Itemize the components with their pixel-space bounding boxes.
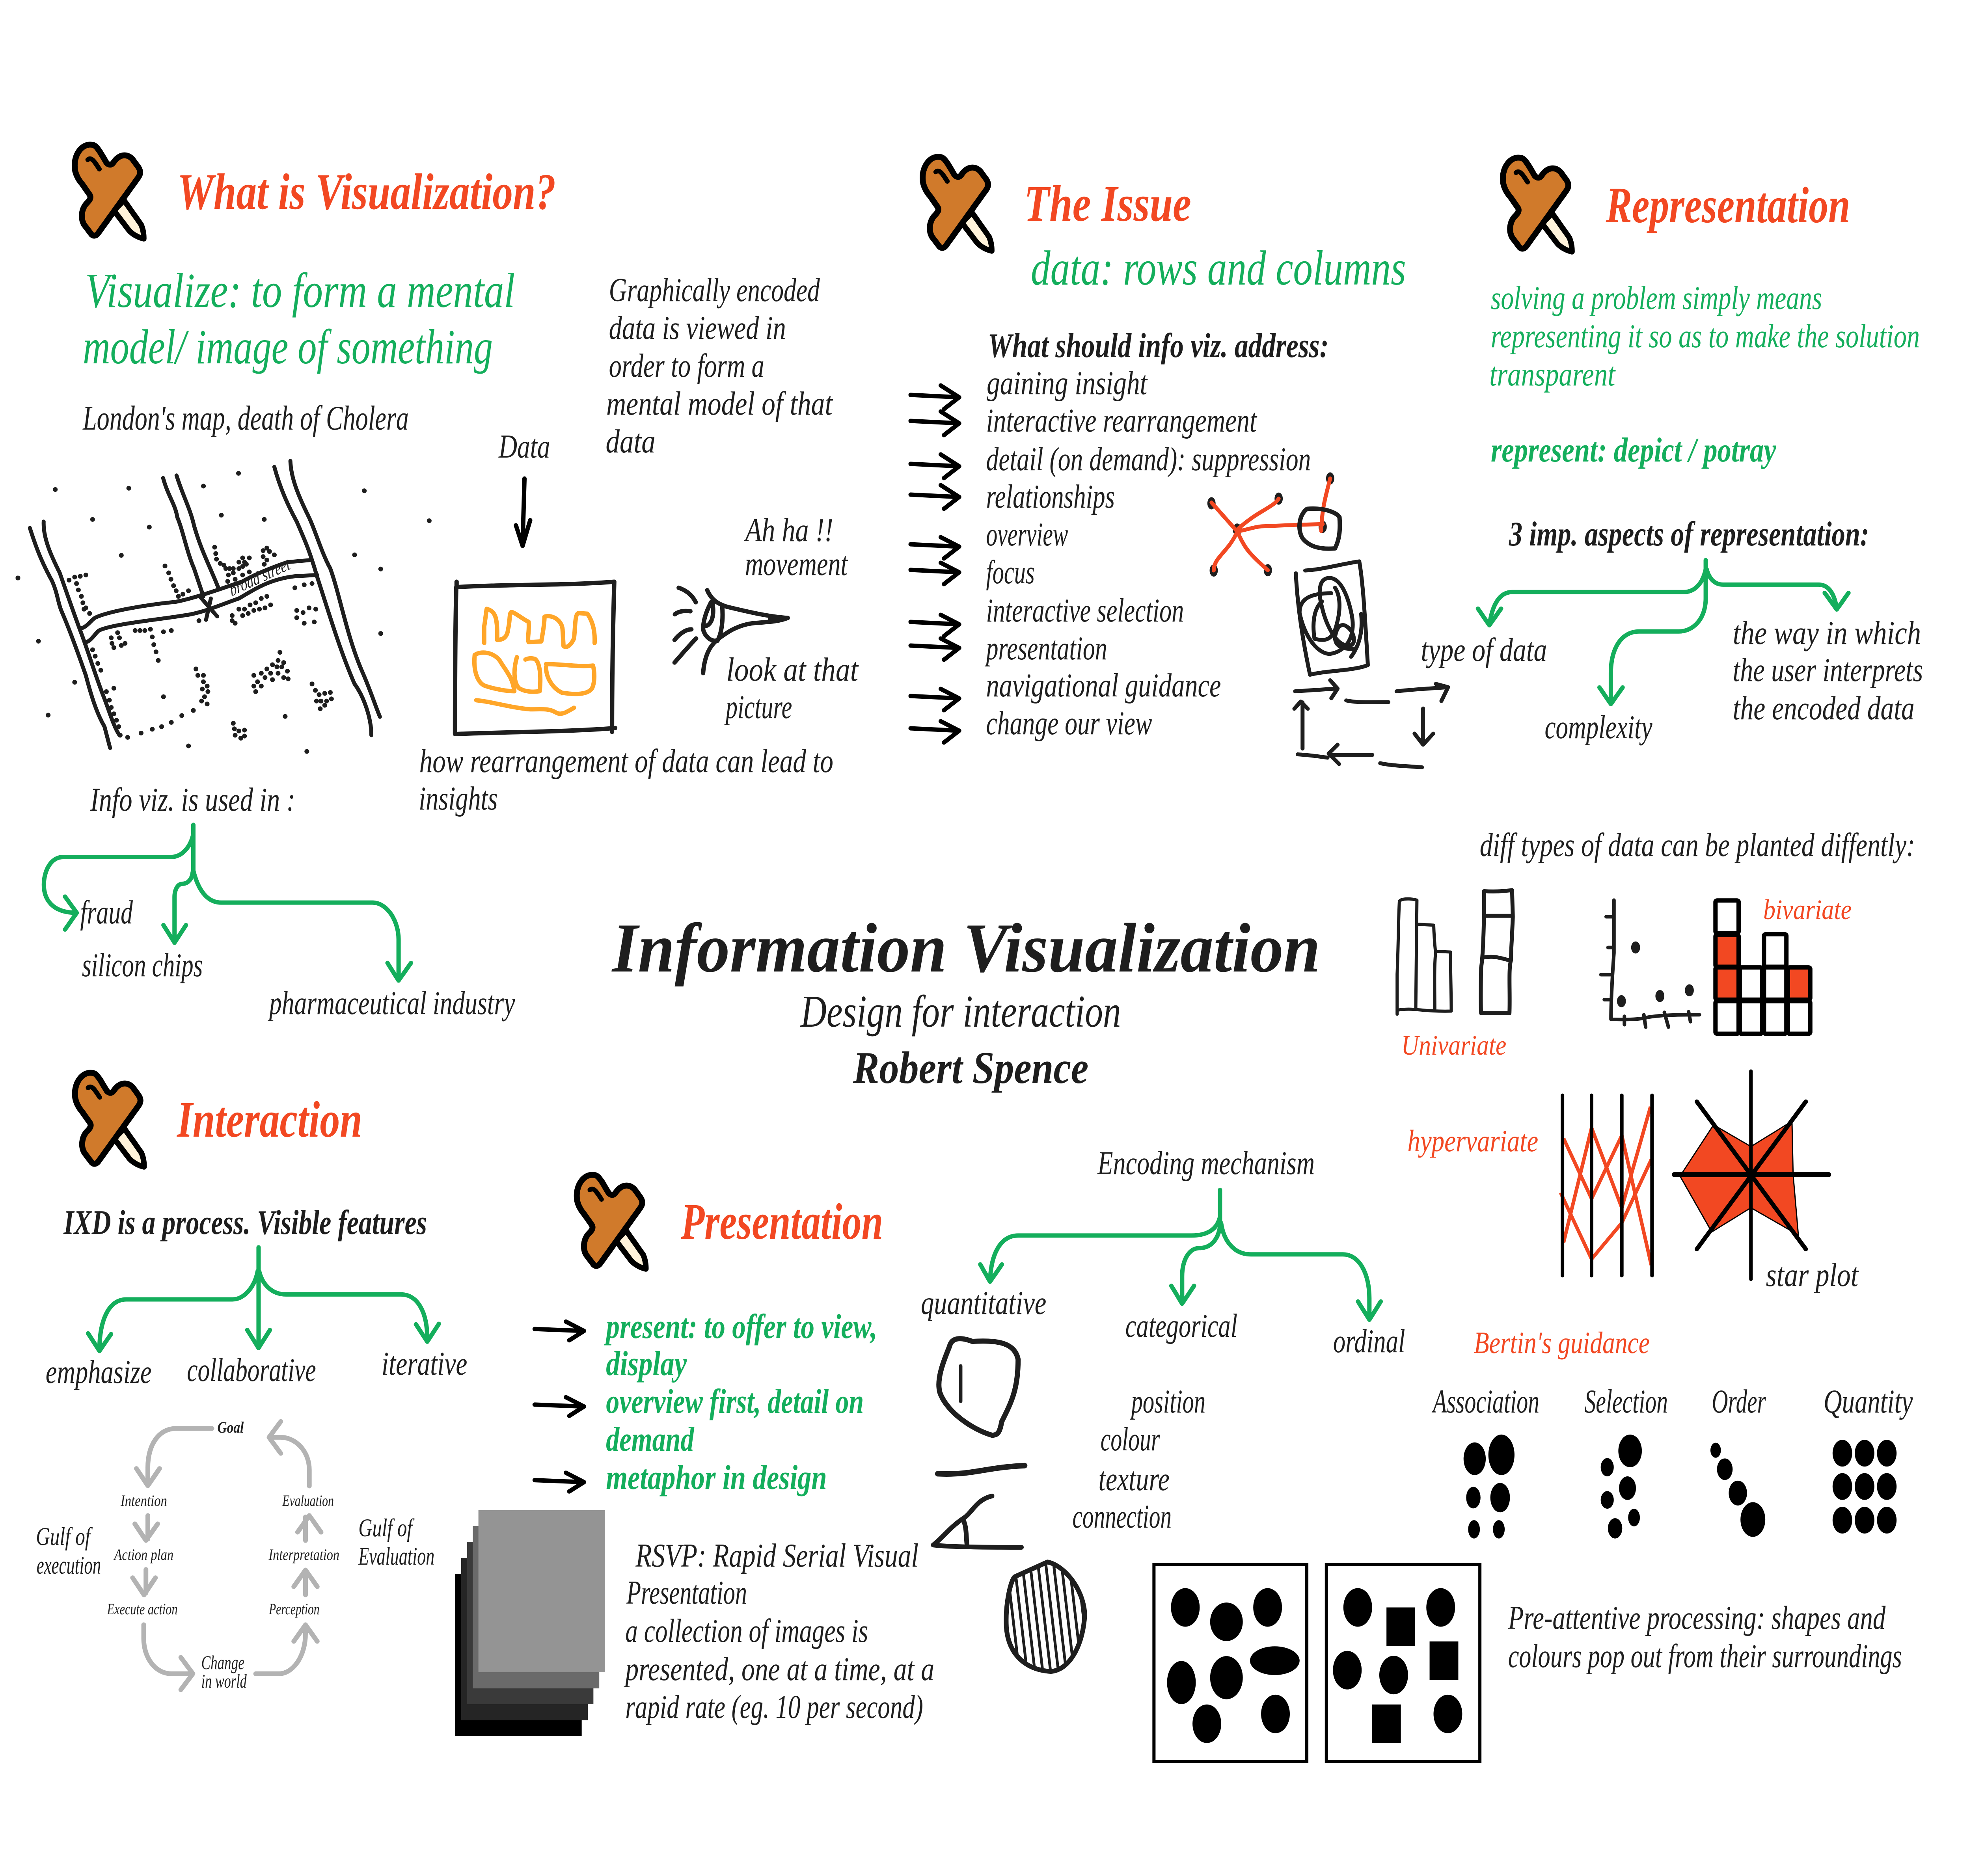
diagram: norman action cycle: Intention [120,1492,167,1509]
labels: aspects: complexity [1544,709,1652,746]
icon: eye [674,588,789,673]
text: issue list: interactive selection [986,592,1184,629]
diagram: norman action cycle: Goal [218,1419,244,1436]
chart: order dots [1710,1443,1765,1537]
text: london map caption: London's map, death of Cholera [82,399,409,437]
labels: aspects: the user interprets [1733,651,1923,689]
labels: bertin columns: Selection [1584,1383,1668,1420]
text: graphically encoded: data is viewed in [609,309,786,346]
text: rsvp: a collection of images is [625,1612,868,1649]
labels: info viz uses: fraud [80,894,133,931]
labels: ixd features: emphasize [46,1353,152,1390]
text: represent depict: represent: depict / potray [1491,431,1776,469]
labels: encoding types: ordinal [1333,1323,1405,1360]
text: visualize definition: model/ image of something [83,320,493,374]
text: gulf of execution [36,1522,101,1580]
diagram: rearranged data box [455,582,615,734]
icon: blob [939,1339,1018,1435]
text: rsvp: rapid rate (eg. 10 per second) [625,1688,923,1725]
text: look at that picture: picture [724,689,792,726]
text: issue list: focus [986,554,1035,591]
text: gulf of evaluation: Evaluation [358,1542,434,1571]
labels: info viz uses: silicon chips [82,947,203,984]
map: broad street cholera map [18,461,429,752]
labels: aspects: type of data [1421,631,1547,668]
text: presentation points: overview first, detail on [606,1382,864,1420]
panel: data types [1397,826,1915,1293]
diagram: scribble frame [1296,561,1368,675]
chart: quantity dots [1833,1440,1896,1534]
title: Information Visualization [611,909,1320,987]
text: issue list: overview [986,516,1068,553]
text: issue list: presentation [984,630,1107,667]
text: three aspects: 3 imp. aspects of representation: [1509,515,1869,553]
text: solving a problem [1489,279,1920,393]
heading: the issue: The Issue [1024,175,1191,232]
panel: what is visualization [18,145,859,1022]
text: visualize definition [83,263,515,374]
map: broad street cholera map: broad street [228,554,292,600]
text: pre-attentive: Pre-attentive processing: shapes and [1508,1599,1886,1636]
arrows: encoding branches [980,1190,1381,1320]
text: ah ha movement: Ah ha !! [743,512,833,549]
heading: bertin's guidance: Bertin's guidance [1474,1326,1650,1360]
labels: bertin columns: Association [1431,1383,1539,1420]
text: graphically encoded: mental model of that [606,385,833,422]
text: solving a problem: representing it so as to make the solution [1491,318,1920,355]
text: graphically encoded: order to form a [609,347,764,384]
labels: aspects: the way in which [1733,614,1921,651]
labels: aspects [1421,614,1923,746]
graphic: stack of images [455,1510,605,1736]
labels: aspects: the encoded data [1733,690,1915,727]
text: visualize definition: Visualize: to form a mental [85,263,515,318]
title block [611,909,1320,1093]
text: info viz used in: Info viz. is used in : [90,781,295,818]
heading: interaction: Interaction [176,1091,362,1148]
labels: encoding types: categorical [1125,1307,1237,1344]
diagram: arrow cycle [1294,680,1448,767]
text: issue list: change our view [986,705,1152,742]
labels: info viz uses [80,894,515,1022]
heading: what is visualization: What is Visualization? [177,163,556,220]
figure: mixed shapes box [1326,1565,1480,1761]
text: what should info viz address: What should info viz. address: [988,326,1329,365]
labels: ixd features: iterative [382,1345,467,1382]
panel: bertin's guidance [1431,1326,1913,1539]
text: encoding channels: colour [1101,1421,1160,1458]
text: look at that picture [724,651,859,726]
icon: pin representation [1503,158,1572,252]
icon: pin the issue [923,157,992,251]
text: diff types of data: diff types of data can be planted diffently: [1480,826,1915,864]
labels: bertin columns [1431,1383,1913,1420]
text: encoding channels [1072,1383,1205,1535]
text: presentation points: display [606,1344,687,1383]
text: presentation points: demand [606,1420,695,1458]
diagram: norman action cycle: in world [201,1670,247,1692]
arrow: data down [516,478,530,546]
icon: pin presentation [577,1175,646,1269]
text: solving a problem: transparent [1489,356,1616,393]
text: issue list: navigational guidance [986,667,1221,704]
text: encoding channels: position [1130,1383,1205,1420]
label: hypervariate: hypervariate [1407,1124,1538,1158]
text: look at that picture: look at that [726,651,859,688]
diagram: norman action cycle [107,1419,339,1692]
diagram: norman action cycle: Perception [268,1601,320,1618]
text: encoding channels: connection [1072,1498,1172,1535]
text: graphically encoded: Graphically encoded [609,272,820,309]
text: graphically encoded: data [606,423,656,460]
chart: parallel coordinates [1561,1095,1652,1276]
panel: representation [1421,158,1923,746]
icon: hatched blob [999,1562,1090,1673]
text: gulf of execution: Gulf of [36,1522,93,1551]
text: rsvp: RSVP: Rapid Serial Visual [635,1537,918,1574]
text: how rearrangement: how rearrangement of data can lead to [419,743,833,780]
chart: bivariate grid [1716,901,1810,1034]
text: ah ha movement [743,512,848,583]
text: presentation points [604,1307,877,1496]
chart: star plot [1675,1071,1829,1279]
text: rsvp: presented, one at a time, at a [624,1651,934,1688]
heading: presentation: Presentation [680,1193,883,1250]
figure: ovals box [1154,1565,1307,1761]
chart: selection dots [1601,1435,1642,1539]
chart: univariate bars [1397,890,1513,1014]
labels: ixd features [46,1345,467,1390]
arrows: presentation bullets [535,1321,584,1491]
diagram: norman action cycle: Action plan [114,1546,173,1563]
label: univariate: Univariate [1401,1029,1506,1061]
text: how rearrangement: insights [419,780,498,817]
labels: ixd features: collaborative [187,1351,316,1388]
heading: representation: Representation [1606,177,1850,233]
labels: bertin columns: Quantity [1824,1383,1913,1420]
text: encoding mechanism: Encoding mechanism [1097,1145,1315,1182]
arrows: aspects branches [1478,560,1848,704]
text: presentation points: metaphor in design [606,1458,827,1496]
text: gulf of evaluation: Gulf of [358,1514,415,1542]
author: Robert Spence [853,1043,1088,1093]
arrows: ixd branches [88,1247,439,1351]
text: presentation points: present: to offer to view, [604,1307,877,1346]
text: solving a problem: solving a problem simply means [1491,279,1822,316]
panel: pre-attentive processing [1154,1565,1902,1761]
text: how rearrangement [419,743,833,817]
text: issue list: detail (on demand): suppression [986,441,1311,478]
label: star plot: star plot [1766,1256,1859,1293]
panel: interaction [36,1073,467,1692]
text: issue list: relationships [986,478,1115,515]
arrows: issue list bullets [911,385,959,743]
diagram: norman action cycle: Execute action [107,1601,178,1618]
arrows: info viz branches [44,825,411,981]
text: issue list: gaining insight [987,365,1148,402]
chart: association dots [1464,1435,1515,1539]
text: issue list [984,365,1311,742]
icon: line [938,1466,1025,1474]
text: issue list: interactive rearrangement [986,402,1257,439]
label: bivariate: bivariate [1763,894,1852,925]
text: rsvp: Presentation [626,1574,747,1611]
panel: presentation [455,1175,934,1736]
text: data rows and columns: data: rows and columns [1031,241,1406,295]
labels: encoding types [921,1284,1405,1360]
subtitle: Design for interaction [800,986,1121,1037]
text: gulf of evaluation [358,1514,434,1571]
text: ah ha movement: movement [745,545,848,583]
icon: connection [933,1496,1021,1547]
text: gulf of execution: execution [37,1551,101,1580]
text: pre-attentive: colours pop out from their surroundings [1508,1638,1902,1675]
diagram: norman action cycle: Change [201,1652,244,1673]
text: pre-attentive [1508,1599,1902,1675]
panel: encoding mechanism [921,1145,1405,1673]
icon: pin what is visualization [75,145,144,239]
text: rsvp [624,1537,934,1725]
labels: encoding types: quantitative [921,1284,1046,1321]
text: encoding channels: texture [1099,1461,1170,1498]
labels: info viz uses: pharmaceutical industry [268,985,515,1022]
panel: the issue [911,157,1448,767]
labels: bertin columns: Order [1712,1383,1766,1420]
text: ixd is a process: IXD is a process. Visible features [63,1203,427,1241]
text: graphically encoded [606,272,833,460]
chart: scatter plot [1601,900,1699,1027]
icon: pin interaction [75,1073,144,1167]
diagram: norman action cycle: Evaluation [282,1492,334,1509]
diagram: network graph [1207,473,1340,577]
diagram: norman action cycle: Interpretation [268,1546,339,1563]
label: data: Data [498,428,550,465]
